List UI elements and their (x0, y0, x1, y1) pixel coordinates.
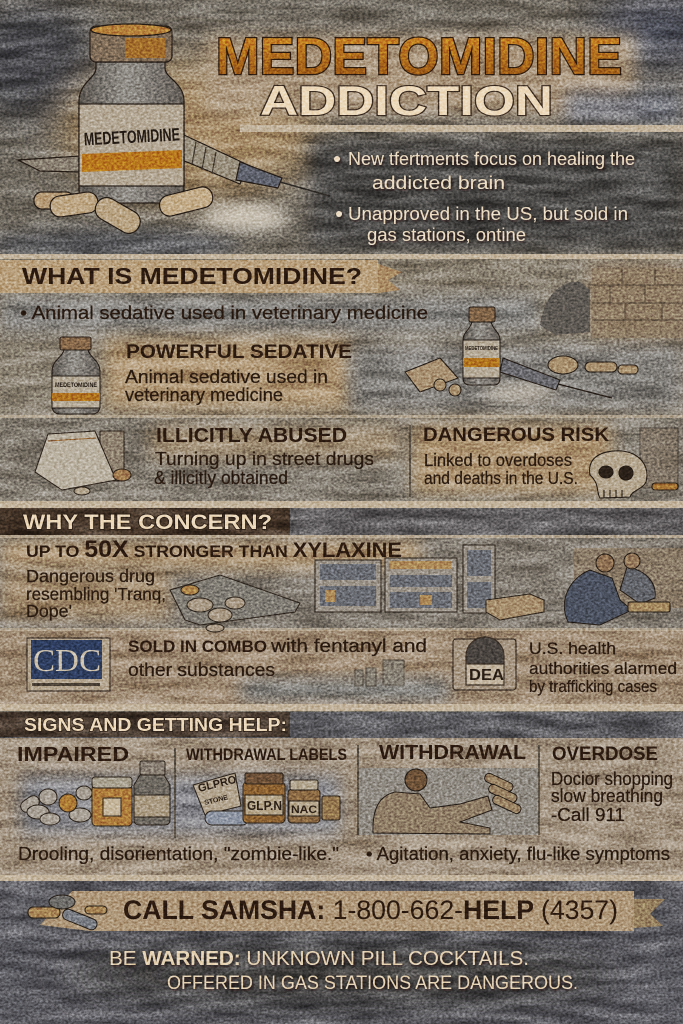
title: MEDETOMIDINE (216, 28, 622, 86)
block: illicitly abused: ILLICITLY ABUSED (156, 425, 347, 447)
hero bullets (334, 148, 635, 245)
illustration: small vial (52, 337, 100, 414)
illustration: store shelves, rubble, boxes (170, 545, 544, 632)
text: withdrawal symptoms: • Agitation, anxiety, flu-like symptoms (366, 844, 670, 864)
block: health authorities (529, 639, 677, 696)
icon: pills and jars (18, 761, 170, 826)
panel: overdose (551, 744, 673, 825)
illustration: skull (590, 428, 678, 498)
panel: withdrawal (359, 742, 538, 835)
icon: supplement jars (193, 773, 340, 825)
illustration: two men helping (564, 548, 683, 625)
icon: supplement jars: GLPRO (197, 774, 238, 795)
block: 50x stronger: resembling 'Tranq, (26, 584, 166, 604)
hero bullets: New tfertments focus on healing the (348, 148, 635, 169)
illustration: brick wall and crouching figure (540, 268, 683, 338)
illustration: large vial with syringe and pills (18, 24, 330, 237)
vial (79, 24, 184, 203)
dividers (0, 125, 683, 881)
block: sold in combo: other substances (128, 660, 275, 680)
illustration: vial, packet, syringe, rubble (405, 307, 638, 401)
block: dangerous risk: Linked to overdoses (424, 450, 572, 470)
pills (34, 185, 215, 237)
icon: pills on ribbon (28, 895, 107, 931)
ribbon: call samsha (28, 891, 665, 931)
warning text: BE WARNED: UNKNOWN PILL COCKTAILS. (109, 948, 529, 970)
powder (197, 205, 293, 229)
icon: CDC badge: CDC (33, 642, 101, 678)
block: 50x stronger: Dope' (26, 601, 72, 621)
block: dangerous risk (423, 424, 609, 488)
text: hotline: CALL SAMSHA: 1-800-662-HELP (4357) (123, 895, 618, 925)
text: intro bullet: • Animal sedative used in veterinary medicine (20, 302, 428, 323)
icon: DEA badge (453, 637, 516, 690)
ribbon: what is medetomidine (0, 260, 402, 293)
hero bullets: addicted brain (372, 172, 505, 193)
block: health authorities: authorities alarmed (529, 659, 677, 678)
warning text (109, 948, 578, 994)
block: 50x stronger: UP TO 50X STRONGER THAN XYLAXINE (26, 536, 402, 563)
icon: supplement jars: NAC (291, 804, 317, 816)
illustration: vial, packet, syringe, rubble: MEDETOMIDINE (465, 346, 498, 352)
block: powerful sedative (125, 342, 352, 405)
block: dangerous risk: and deaths in the U.S. (424, 468, 578, 488)
block: powerful sedative: Animal sedative used in (125, 366, 328, 387)
hero bullets: Unapproved in the US, but sold in (348, 203, 628, 224)
illustration: small vial: MEDETOMIDINE (55, 382, 98, 389)
block: illicitly abused (154, 425, 374, 488)
block: health authorities: by trafficking cases (529, 677, 657, 696)
block: powerful sedative: POWERFUL SEDATIVE (126, 342, 352, 363)
hero bullets: gas stations, ontine (367, 224, 526, 245)
heading: why the concern: WHY THE CONCERN? (23, 511, 272, 534)
block: powerful sedative: veterinary medicine (125, 384, 283, 405)
icon: CDC badge (27, 638, 110, 691)
icon: supplement jars: GLP.N (247, 798, 282, 813)
panel: withdrawal: WITHDRAWAL (379, 742, 526, 764)
block: 50x stronger (26, 536, 402, 621)
heading: signs and getting help: SIGNS AND GETTING HELP: (24, 714, 287, 735)
warning text: OFFERED IN GAS STATIONS ARE DANGEROUS. (167, 973, 578, 994)
block: sold in combo: SOLD IN COMBO (128, 638, 267, 656)
block: illicitly abused: & illicitly obtained (154, 467, 288, 488)
panel: overdose: Docior shopping (551, 768, 673, 789)
block: sold in combo (128, 636, 427, 680)
icon: DEA badge: DEA (469, 667, 504, 684)
text: impaired symptoms: Drooling, disorientation, "zombie-like." (18, 844, 339, 864)
block: dangerous risk: DANGEROUS RISK (423, 424, 609, 446)
vial label: MEDETOMIDINE (83, 124, 180, 149)
illustration: drug baggies (35, 431, 131, 495)
panel: withdrawal labels: WITHDRAWAL LABELS (186, 745, 347, 764)
block: 50x stronger: Dangerous drug (26, 566, 155, 586)
icon: faint pills and bottles (355, 660, 404, 686)
panel: impaired: IMPAIRED (17, 744, 129, 766)
block: illicitly abused: Turning up in street drugs (155, 448, 374, 469)
icon: supplement jars: STONE (204, 794, 229, 807)
panel: withdrawal labels (186, 745, 347, 825)
block: sold in combo: with fentanyl and (270, 636, 427, 656)
syringe (18, 135, 330, 196)
icon: man on the ground (373, 769, 522, 834)
banner: why the concern (0, 508, 683, 535)
subtitle: ADDICTION (260, 77, 553, 124)
panel: overdose: OVERDOSE (552, 744, 658, 765)
banner: signs and getting help (0, 712, 290, 737)
panel: impaired (17, 744, 170, 826)
panel: overdose: slow breathing (551, 785, 663, 806)
panel: overdose: -Call 911 (551, 804, 625, 825)
block: health authorities: U.S. health (529, 639, 616, 658)
heading: what is medetomidine: WHAT IS MEDETOMIDINE? (22, 263, 362, 289)
